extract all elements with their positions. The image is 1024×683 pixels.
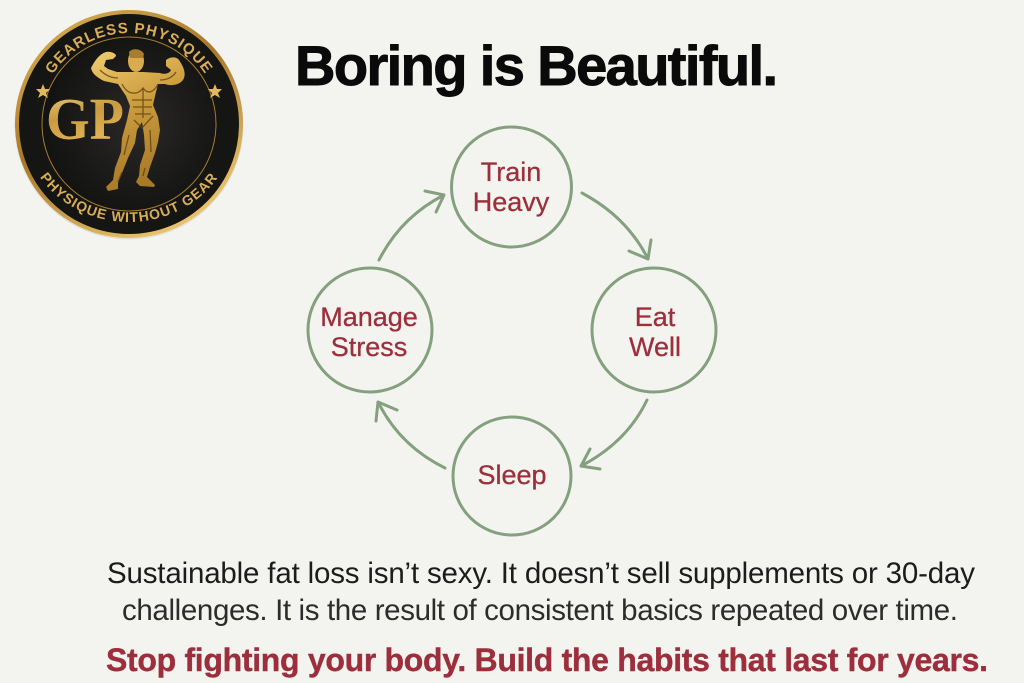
arrow: Train Heavy to Eat Well xyxy=(582,193,651,259)
logo badge: Gearless Physique xyxy=(14,10,244,240)
cycle diagram xyxy=(308,127,716,535)
node: Eat Well: Well xyxy=(629,332,681,362)
node: Eat Well: Eat xyxy=(635,302,676,332)
icon: golden bodybuilder xyxy=(91,49,185,191)
node: Manage Stress: Manage xyxy=(320,302,418,332)
call to action: Stop fighting your body. Build the habits that last for years. xyxy=(106,642,988,678)
body text: challenges. It is the result of consistent basics repeated over time. xyxy=(122,594,958,627)
node: Manage Stress xyxy=(308,268,432,392)
node: Sleep: Sleep xyxy=(477,460,547,490)
arrow: Eat Well to Sleep xyxy=(581,400,647,469)
badge text: Physique Without Gear: PHYSIQUE WITHOUT GEAR xyxy=(40,172,218,222)
badge text: Gearless Physique: GEARLESS PHYSIQUE xyxy=(46,22,213,74)
node: Train Heavy: Train xyxy=(481,157,541,187)
icon: right star xyxy=(208,84,222,98)
node: Sleep xyxy=(453,417,571,535)
arrow: Manage Stress to Train Heavy xyxy=(379,191,444,260)
badge monogram: GP: GP xyxy=(46,86,124,152)
arrow: Sleep to Manage Stress xyxy=(376,402,445,468)
node: Train Heavy: Heavy xyxy=(473,187,550,217)
icon: left star xyxy=(36,84,50,98)
node: Manage Stress: Stress xyxy=(331,332,407,362)
node: Train Heavy xyxy=(452,127,572,247)
title: Boring is Beautiful. xyxy=(295,34,778,97)
node: Eat Well xyxy=(592,268,716,392)
body text: Sustainable fat loss isn’t sexy. It doesn’t sell supplements or 30-day xyxy=(107,557,975,590)
